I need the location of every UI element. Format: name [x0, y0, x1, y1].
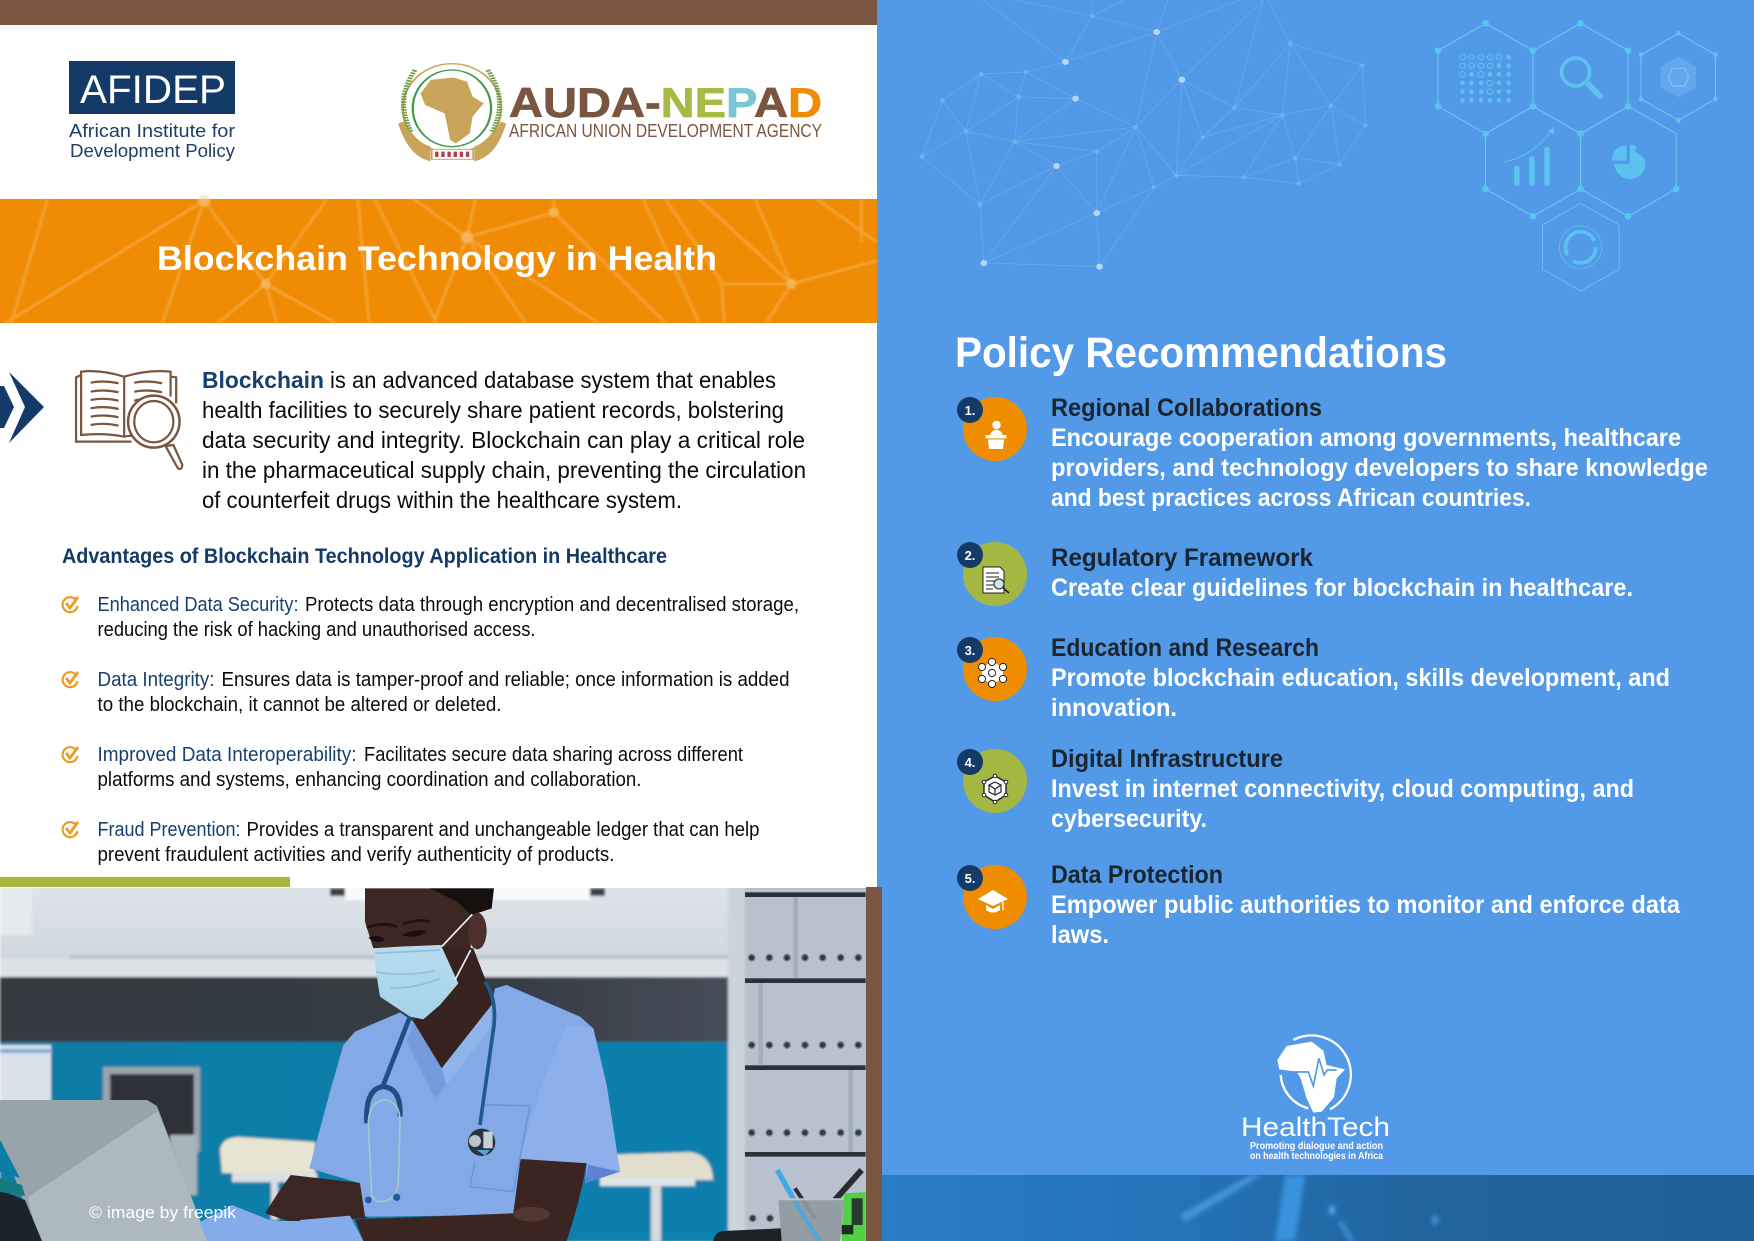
- item 1: regional collaborations: [957, 394, 1708, 512]
- icon circle: document search: [963, 542, 1027, 606]
- number badge: [957, 542, 983, 568]
- advantage: improved data interoperability: platforms and systems, enhancing coordination and collaboration.: [98, 769, 642, 791]
- photo credit: © image by freepik: [89, 1203, 237, 1222]
- advantages heading: Advantages of Blockchain Technology Application in Healthcare: [62, 545, 667, 568]
- cabinet shelves and binders: [745, 892, 866, 1222]
- intro paragraph: in the pharmaceutical supply chain, preventing the circulation: [202, 457, 806, 483]
- intro paragraph: of counterfeit drugs within the healthcare system.: [202, 487, 682, 513]
- item 4: digital infrastructure: Invest in internet connectivity, cloud computing, and: [1051, 775, 1634, 803]
- icon: orange check: [63, 747, 78, 762]
- icon: orange check: [63, 672, 78, 687]
- advantage: enhanced data security: Enhanced Data Security:: [98, 594, 298, 616]
- advantage: improved data interoperability: Facilitates secure data sharing across different: [364, 744, 743, 766]
- item 3: education and research: [957, 634, 1670, 722]
- item 5: data protection: Empower public authorities to monitor and enforce data: [1051, 891, 1681, 919]
- logo: AUDA-NEPAD emblem: [398, 64, 506, 161]
- number badge: 3.: [965, 643, 975, 658]
- photo: health worker at laptop: [0, 885, 870, 1241]
- advantage: improved data interoperability: [63, 744, 743, 791]
- icon: dashed ring: [1559, 226, 1602, 269]
- hexagon nodes: [1435, 20, 1718, 220]
- icon: double chevron arrow: [0, 372, 44, 443]
- advantage: improved data interoperability: Improved Data Interoperability:: [98, 744, 356, 766]
- item 1: regional collaborations: and best practices across African countries.: [1051, 484, 1531, 512]
- intro paragraph: health facilities to securely share patient records, bolstering: [202, 397, 784, 423]
- icon circle: cube hexagon: [963, 749, 1027, 813]
- person: [265, 888, 620, 1241]
- title: Blockchain Technology in Health: [157, 240, 717, 278]
- gloved hand: [200, 1205, 300, 1241]
- icon circle: graduation cap: [963, 865, 1027, 929]
- number badge: [957, 749, 983, 775]
- laptop: [0, 1100, 208, 1241]
- icon: growth chart: [1505, 127, 1554, 183]
- advantage: fraud prevention: Fraud Prevention:: [98, 819, 240, 841]
- advantage: data integrity: Ensures data is tamper-proof and reliable; once information is added: [222, 669, 790, 691]
- white left page background: [0, 0, 877, 1241]
- item 1: regional collaborations: Encourage cooperation among governments, healthcare: [1051, 424, 1681, 452]
- number badge: 1.: [965, 403, 975, 418]
- brown vertical strip: [866, 887, 882, 1241]
- logo: AFIDEP: Development Policy: [70, 141, 235, 161]
- logo: HealthTech: Promoting dialogue and action: [1250, 1141, 1383, 1152]
- advantage: enhanced data security: reducing the risk of hacking and unauthorised access.: [98, 619, 536, 641]
- logo: AFIDEP: [69, 61, 235, 161]
- number badge: 2.: [965, 548, 975, 563]
- icon: magnifier: [1562, 58, 1600, 96]
- orange title banner: [0, 199, 877, 323]
- advantage: enhanced data security: [63, 594, 799, 641]
- number badge: [957, 865, 983, 891]
- item 1: regional collaborations: Regional Collaborations: [1051, 394, 1322, 422]
- pencil holder and clip: [713, 1170, 866, 1241]
- logo: HealthTech: HealthTech: [1241, 1112, 1390, 1142]
- intro paragraph: [202, 367, 806, 513]
- blurred room background: [0, 885, 870, 1241]
- intro paragraph: is an advanced database system that enables: [330, 367, 776, 393]
- logo: AUDA-NEPAD wordmark: AUDA- NEPAD: [509, 79, 822, 126]
- hexagon outlines: [1438, 23, 1715, 291]
- number badge: [957, 397, 983, 423]
- icon circle: blockchain network: [963, 637, 1027, 701]
- hexagon technology graphic: [1435, 20, 1718, 291]
- number badge: [957, 637, 983, 663]
- advantage: fraud prevention: Provides a transparent and unchangeable ledger that can help: [246, 819, 760, 841]
- item 5: data protection: Data Protection: [1051, 861, 1223, 889]
- item 1: regional collaborations: providers, and technology developers to share knowledge: [1051, 454, 1708, 482]
- number badge: 5.: [965, 871, 975, 886]
- advantage: data integrity: to the blockchain, it cannot be altered or deleted.: [98, 694, 502, 716]
- africa ring and map: [1277, 1035, 1351, 1113]
- item 2: regulatory framework: Regulatory Framework: [1051, 544, 1313, 572]
- network background pattern: [920, 0, 1368, 270]
- item 5: data protection: laws.: [1051, 921, 1109, 949]
- policy recommendations heading: Policy Recommendations: [955, 329, 1447, 377]
- intro paragraph: Blockchain: [202, 367, 324, 393]
- icon: orange check: [63, 822, 78, 837]
- logo: AFIDEP: African Institute for: [69, 121, 235, 141]
- item 3: education and research: innovation.: [1051, 694, 1177, 722]
- icon circle: podium: [963, 397, 1027, 461]
- icon: dot grid: [1460, 54, 1511, 103]
- advantage: fraud prevention: [63, 819, 760, 866]
- banner network pattern: [6, 195, 877, 323]
- item 5: data protection: [957, 861, 1681, 949]
- green accent bar: [0, 877, 290, 887]
- logo: AUDA-NEPAD wordmark: AFRICAN UNION DEVELOPMENT AGENCY: [509, 121, 822, 141]
- icon: orange check: [63, 597, 78, 612]
- logo: HealthTech: [1241, 1035, 1390, 1162]
- top brown bar: [0, 0, 877, 25]
- item 4: digital infrastructure: [957, 745, 1634, 833]
- icon: pie chart: [1612, 145, 1645, 179]
- bottom blue strip: [882, 1175, 1754, 1241]
- item 4: digital infrastructure: Digital Infrastructure: [1051, 745, 1283, 773]
- logo: HealthTech: on health technologies in Africa: [1250, 1151, 1383, 1162]
- number badge: 4.: [965, 755, 975, 770]
- advantage: data integrity: Data Integrity:: [98, 669, 214, 691]
- advantage: fraud prevention: prevent fraudulent activities and verify authenticity of products.: [98, 844, 614, 866]
- advantage: data integrity: [63, 669, 790, 716]
- item 4: digital infrastructure: cybersecurity.: [1051, 805, 1207, 833]
- item 2: regulatory framework: [957, 542, 1633, 606]
- item 3: education and research: Education and Research: [1051, 634, 1319, 662]
- right blue panel background: [877, 0, 1754, 1241]
- logo: AFIDEP: AFIDEP: [80, 68, 226, 112]
- icon: inner hexagon: [1661, 57, 1696, 97]
- advantage: enhanced data security: Protects data through encryption and decentralised storage,: [305, 594, 799, 616]
- intro paragraph: data security and integrity. Blockchain can play a critical role: [202, 427, 805, 453]
- item 3: education and research: Promote blockchain education, skills development, and: [1051, 664, 1670, 692]
- icon: book with magnifier: [76, 371, 182, 469]
- item 2: regulatory framework: Create clear guidelines for blockchain in healthcare.: [1051, 574, 1633, 602]
